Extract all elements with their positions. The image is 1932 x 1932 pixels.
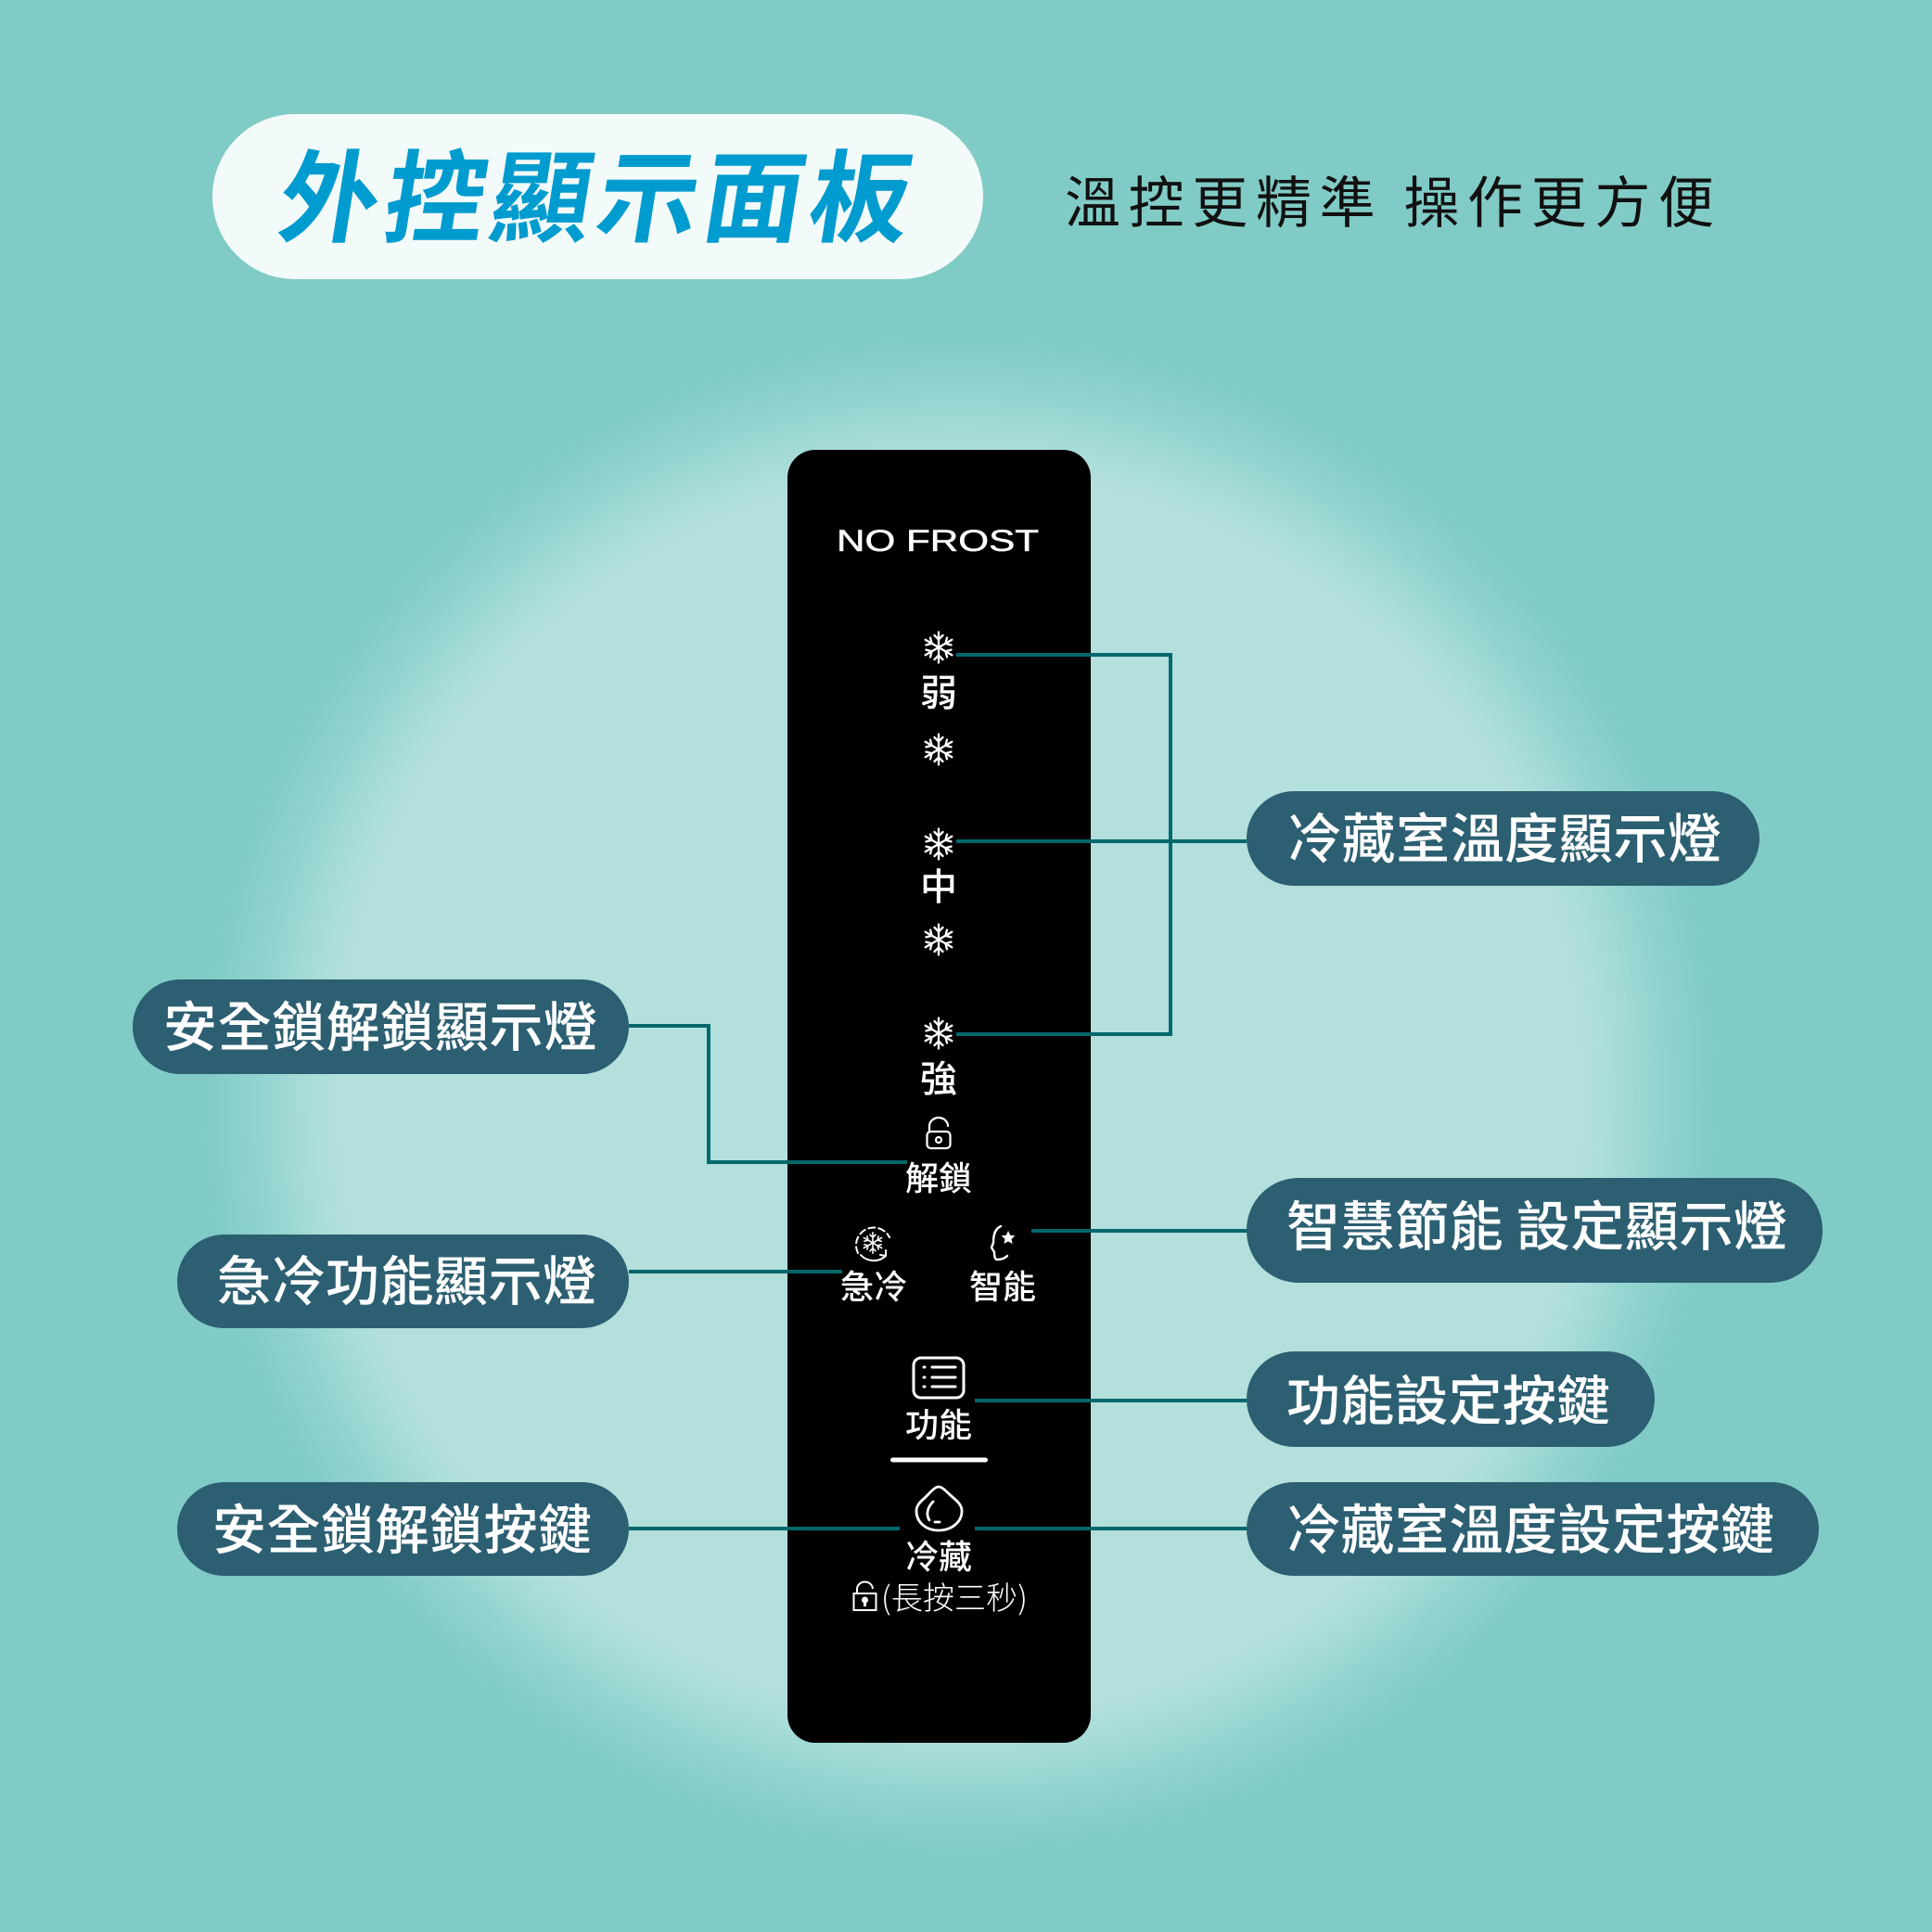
icon: snowflake 5 <box>923 1018 954 1048</box>
callout: lock key <box>177 1482 629 1576</box>
icon: snowflake 2 <box>923 735 954 764</box>
connector: smart <box>1031 1229 1247 1233</box>
connector: fridge temperature lights <box>956 655 1247 1034</box>
callout: fridge temperature display light: 冷藏室溫度顯示燈 <box>1287 796 1721 874</box>
divider <box>890 1458 988 1462</box>
label: smart: 智能 <box>969 1260 1036 1309</box>
callout: smart energy setting display light: 智慧節能 設定顯示燈 <box>1286 1184 1787 1261</box>
callout: lock key: 安全鎖解鎖按鍵 <box>212 1487 592 1565</box>
icon: unlock <box>928 1118 950 1148</box>
icon: water drop <box>916 1487 962 1530</box>
brand text: NO FROST: NO FROST <box>837 524 1039 557</box>
label: long press three seconds: (長按三秒) <box>881 1573 1028 1619</box>
callout: smart energy setting display light <box>1247 1178 1823 1283</box>
callout: rapid cool display light: 急冷功能顯示燈 <box>217 1238 596 1316</box>
connector: fridge key <box>975 1527 1247 1530</box>
panel: control display <box>787 450 1091 1743</box>
label: unlock: 解鎖 <box>905 1152 972 1200</box>
icon: rapid cool <box>856 1227 889 1260</box>
icon: snowflake 1 <box>923 633 954 662</box>
label: strong: 強 <box>920 1049 957 1103</box>
callout: fridge temperature display light <box>1247 791 1759 886</box>
callout: rapid cool display light <box>177 1235 629 1328</box>
label: rapid cool: 急冷 <box>840 1260 907 1309</box>
icon: smart head <box>992 1226 1015 1260</box>
icon: snowflake 3 <box>923 829 954 859</box>
callout: lock status display light: 安全鎖解鎖顯示燈 <box>163 984 597 1062</box>
connector: lock key <box>629 1527 900 1530</box>
background glow circle <box>204 339 1716 1850</box>
label: medium: 中 <box>920 857 957 911</box>
callout: function setting key <box>1247 1351 1655 1447</box>
title: 外控顯示面板 <box>270 119 924 263</box>
icon: snowflake 4 <box>923 924 954 955</box>
subtitle: 溫控更精準 操作更方便 <box>1065 159 1714 239</box>
icon: function list <box>914 1358 964 1398</box>
label: weak: 弱 <box>920 663 957 717</box>
callout: function setting key: 功能設定按鍵 <box>1286 1358 1610 1436</box>
icon: small lock <box>853 1581 876 1610</box>
connector: rapid cool <box>629 1270 842 1273</box>
title pill <box>212 114 983 279</box>
connector: function key <box>975 1399 1247 1402</box>
label: function: 功能 <box>905 1399 972 1447</box>
label: fridge: 冷藏 <box>905 1530 972 1579</box>
connector: lock indicator <box>629 1026 907 1162</box>
callout: fridge temperature setting key: 冷藏室溫度設定按鍵 <box>1286 1487 1774 1565</box>
